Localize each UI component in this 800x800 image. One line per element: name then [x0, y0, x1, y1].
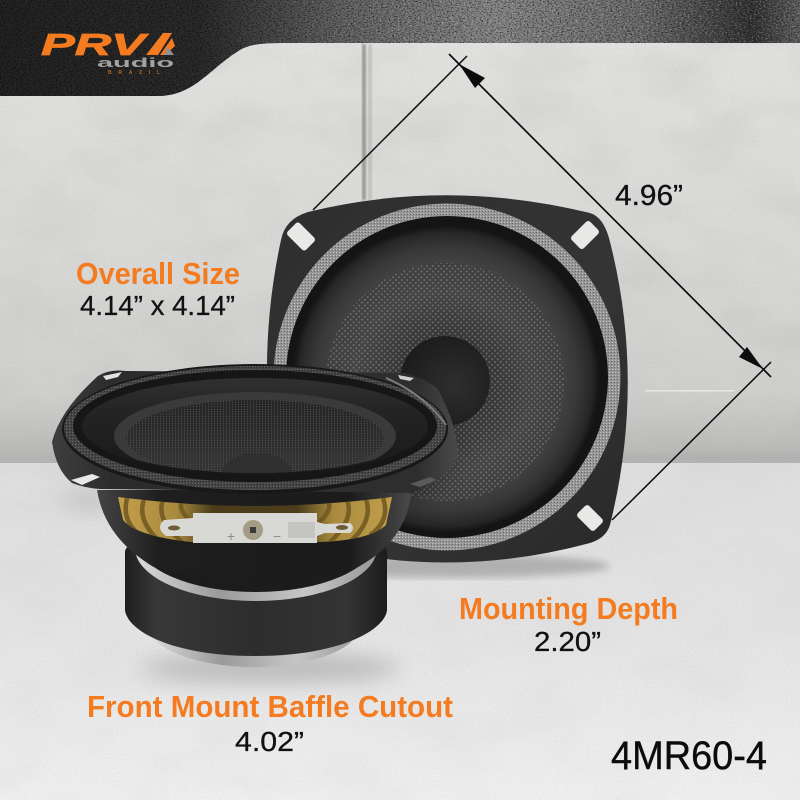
logo audio text: audio	[97, 55, 174, 70]
back speaker grey gasket ring	[274, 204, 620, 550]
basket	[97, 490, 412, 578]
mounting depth heading: Mounting Depth	[459, 591, 678, 626]
front speaker flange	[52, 371, 458, 493]
overall size heading: Overall Size	[76, 256, 240, 291]
front speaker surround	[82, 378, 428, 475]
rim outer	[62, 364, 448, 494]
logo: PRV audio Brazil	[41, 27, 175, 76]
magnet top plate inner	[136, 486, 376, 592]
back speaker mounting holes	[286, 220, 604, 532]
back speaker, front view	[267, 195, 628, 563]
terminal plus sign: +	[227, 528, 235, 544]
back speaker frame	[267, 195, 628, 563]
baffle cutout value: 4.02”	[235, 726, 304, 757]
flange hole bottom left	[71, 474, 100, 485]
model number: 4MR60-4	[611, 734, 767, 778]
overall size value: 4.14” x 4.14”	[80, 290, 235, 321]
rim highlight	[386, 378, 446, 425]
logo Brazil text: BRAZIL	[108, 70, 160, 76]
label: diagonal measurement: 4.96”	[615, 180, 683, 212]
dimension lines: 4.96 inch	[313, 54, 771, 520]
terminal strip	[160, 513, 353, 544]
magnet: bottom silver ring	[148, 583, 360, 667]
terminal minus sign: −	[273, 528, 281, 544]
arrowhead: bottom	[739, 347, 763, 369]
baffle cutout heading: Front Mount Baffle Cutout	[87, 689, 453, 724]
logo wordmark: PRV	[41, 27, 149, 62]
arrowhead: top	[459, 64, 485, 88]
logo triangle mark	[146, 33, 175, 55]
back speaker surround	[293, 226, 599, 532]
front speaker dust cap	[222, 454, 292, 472]
magnet body	[125, 528, 387, 656]
top textured band with logo corner	[0, 0, 800, 96]
back speaker inner black rim	[286, 216, 608, 538]
label: baffle cutout	[87, 689, 453, 757]
label: mounting depth	[459, 591, 678, 657]
mounting depth value: 2.20”	[534, 626, 601, 657]
front speaker cone	[114, 392, 396, 473]
label: overall size	[76, 256, 240, 321]
flange hole bottom right	[410, 477, 437, 487]
shadow of front speaker on back speaker	[205, 385, 455, 515]
magnet top plate silver ring	[135, 495, 377, 601]
back speaker cone	[326, 263, 564, 501]
terminal center rivet	[243, 520, 263, 540]
rim speckled band	[64, 366, 446, 490]
rim inner	[73, 370, 437, 482]
basket window with gold spider	[118, 497, 392, 542]
back speaker dust cap	[400, 336, 490, 426]
floor shadows	[60, 486, 610, 684]
front speaker, angled view	[52, 364, 458, 667]
flange hole top left	[103, 372, 122, 380]
flange hole top right	[398, 375, 414, 381]
